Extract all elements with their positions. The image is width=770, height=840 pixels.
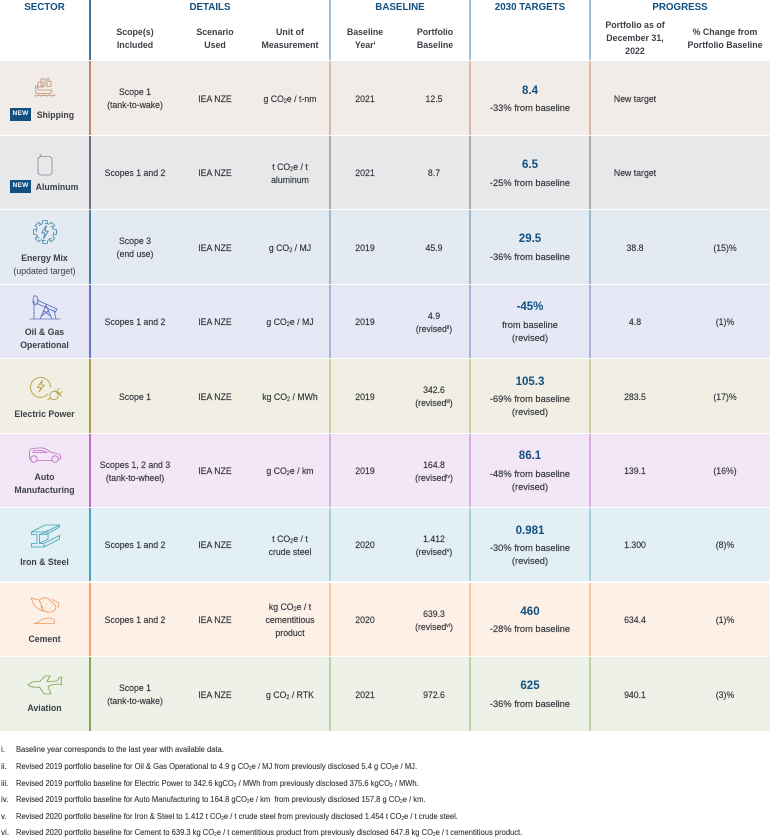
portfolio baseline: (revisedii) [416,324,452,335]
unit: t CO2e / t [272,534,308,545]
sub-heading: unit of measurement: Unit of [276,27,304,38]
baseline year: 2019 [355,466,375,477]
unit: kg CO2 / MWh [262,392,318,403]
footnote v [0,810,770,822]
scenario: IEA NZE [198,392,232,403]
scope: Scopes 1 and 2 [105,540,165,551]
icon: power plug and bolt [30,376,62,400]
portfolio baseline: 45.9 [425,243,443,254]
portfolio baseline: 342.6 [423,385,445,396]
unit [268,534,311,558]
target change: (revised) [512,482,548,493]
footnote v: Revised 2020 portfolio baseline for Iron & Steel to 1.412 t CO2e / t crude steel from previously disclosed 1.454 t CO2e / t crude steel. [16,812,458,822]
sector label: shipping: Shipping [37,110,74,121]
portfolio baseline: (revisediii) [415,398,453,409]
percent change: (1)% [716,317,734,328]
target value: -45% [517,301,543,313]
percent change: (1)% [716,615,734,626]
scenario: IEA NZE [198,466,232,477]
percent change: (16%) [713,466,737,477]
progress value: 139.1 [624,466,646,477]
badge: new [10,108,31,120]
portfolio baseline: 972.6 [423,690,445,701]
sub-heading: scopes included [116,27,154,51]
footnote vi: Revised 2020 portfolio baseline for Cement to 639.3 kg CO2e / t cementitious product from previously disclosed 647.8 kg CO2e / t cementitious product. [16,828,522,838]
scope [117,236,153,260]
portfolio baseline [416,534,452,558]
unit [271,162,309,186]
scope: Scopes 1 and 2 [105,615,165,626]
footnote vi [0,827,770,839]
badge: new: NEW [12,110,29,117]
row: energy mix [0,210,770,284]
target change: -25% from baseline [490,178,570,189]
target change: -48% from baseline [490,469,570,480]
progress value: 283.5 [624,392,646,403]
icon: pumpjack [30,295,60,320]
sub-heading: portfolio as of date: December 31, [606,33,664,44]
unit: g CO2e / t-nm [263,94,317,105]
footnote i [0,744,770,756]
sector label: cement: Cement [28,634,61,645]
scenario: IEA NZE [198,243,232,254]
sub-heading: portfolio as of date [605,20,665,57]
portfolio baseline: (revisedv) [416,547,452,558]
sub-heading: portfolio baseline: Portfolio [417,27,453,38]
footnote ii: ii. [1,762,7,771]
baseline year: 2021 [355,94,375,105]
scope [100,460,170,484]
footnote i: i. [1,745,5,754]
progress value: 1.300 [624,540,646,551]
heading: sector: SECTOR [24,1,65,13]
sector label: aluminum: Aluminum [36,182,78,193]
icon: airplane [28,676,62,694]
sector label: oil and gas operational: Operational [20,340,69,351]
portfolio baseline: 4.9 [428,311,440,322]
icon: gear with lightning bolt [33,220,57,244]
sub-heading: unit of measurement: Measurement [262,40,318,51]
target change [490,469,570,493]
heading: 2030 targets: 2030 TARGETS [495,1,565,13]
target change: (revised) [512,333,548,344]
row: auto manufacturing [0,434,770,507]
unit: kg CO2e / t [269,602,311,613]
row: electric power [0,359,770,432]
footnote vi: vi. [1,828,9,837]
heading: baseline: BASELINE [375,1,425,13]
scope: (tank-to-wake) [107,696,163,707]
sub-heading: portfolio as of date: Portfolio as of [605,20,665,31]
unit: t CO2e / t [272,162,308,173]
sector label: auto manufacturing: Auto [35,472,54,483]
progress value: 4.8 [629,317,641,328]
portfolio baseline: 12.5 [425,94,443,105]
sector label: energy mix: Energy Mix [21,253,68,264]
sector label: auto manufacturing [14,472,75,496]
scope: (tank-to-wheel) [106,473,164,484]
unit: g CO2e / km [266,466,314,477]
portfolio baseline: 164.8 [423,460,445,471]
portfolio baseline [415,609,453,633]
footnote ii [0,761,770,773]
icon: steel i-beam [31,524,60,548]
icon: cement rocks [30,597,60,624]
sector label: iron and steel: Iron & Steel [20,557,69,568]
scenario: IEA NZE [198,168,232,179]
sub-heading: baseline year: Yeari [355,40,375,51]
baseline year: 2019 [355,392,375,403]
footnote v: v. [1,812,7,820]
badge: new: NEW [12,182,29,189]
scope: Scope 1 [119,87,151,98]
icon: can [38,154,52,176]
sector label: auto manufacturing: Manufacturing [14,485,75,496]
sub-heading: baseline year [347,27,383,51]
target change: from baseline [502,320,558,331]
baseline year: 2020 [355,615,375,626]
progress: New target [614,94,656,105]
footnote ii: Revised 2019 portfolio baseline for Oil & Gas Operational to 4.9 g CO2e / MJ from previously disclosed 5.4 g CO2e / MJ. [16,762,417,772]
row: oil and gas [0,285,770,358]
sector label: electric power: Electric Power [14,408,75,420]
scope [94,658,176,732]
unit: g CO2e / MJ [266,317,314,328]
sector label: oil and gas operational: Oil & Gas [25,327,64,338]
sub-heading: scenario used: Used [204,40,226,51]
footnote iii: Revised 2019 portfolio baseline for Electric Power to 342.6 kgCO2 / MWh from previously disclosed 375.6 kgCO2 / MWh. [16,778,419,788]
baseline year: 2019 [355,317,375,328]
target value: 8.4 [522,85,538,97]
sub-heading: portfolio as of date: 2022 [625,46,645,57]
heading: details: DETAILS [189,1,231,13]
portfolio baseline [416,311,452,335]
target change: -36% from baseline [490,252,570,263]
badge: new [10,180,31,193]
row: iron and steel [0,508,770,581]
target change: -28% from baseline [490,624,570,635]
progress value: 940.1 [624,690,646,701]
target change [502,320,558,344]
target value: 0.981 [516,525,544,537]
scope: Scope 1 [119,392,151,403]
unit [265,602,314,639]
footnote iv [0,794,770,806]
target change: -36% from baseline [490,699,570,710]
scenario: IEA NZE [198,317,232,328]
target change [490,543,570,567]
scope [107,87,163,111]
sub-heading: portfolio baseline: Baseline [417,40,453,51]
portfolio baseline: 639.3 [423,609,445,620]
scope: Scope 1 [119,683,151,694]
unit: g CO2 / MJ [269,243,311,254]
footnote iv: iv. [1,795,8,804]
sub-heading: percent change: % Change from [693,27,757,38]
baseline year: 2019 [355,243,375,254]
target change: -30% from baseline [490,543,570,554]
sub-heading: scenario used: Scenario [196,27,234,38]
portfolio baseline [415,460,453,484]
target value: 625 [520,680,540,692]
footnote iv: Revised 2019 portfolio baseline for Auto Manufacturing to 164.8 gCO2e / km from previously disclosed 157.8 g CO2e / km. [16,795,425,805]
scenario: IEA NZE [198,615,232,626]
portfolio baseline: 1.412 [423,534,445,545]
scope: (tank-to-wake) [107,100,163,111]
baseline year: 2021 [355,168,375,179]
sector label: oil and gas operational [20,327,69,351]
sub-heading: scenario used [196,27,234,51]
target value: 6.5 [522,159,538,171]
target value: 105.3 [516,376,544,388]
scope: Scopes 1, 2 and 3 [100,460,170,471]
sub-heading: portfolio baseline [417,27,453,51]
unit: crude steel [269,547,311,558]
unit: product [275,628,305,639]
scenario: IEA NZE [198,690,232,701]
scope: (end use) [117,249,153,260]
target value: 86.1 [519,450,541,462]
sub-heading: percent change [687,27,763,51]
sub-heading: percent change: Portfolio Baseline [687,40,763,51]
portfolio baseline: (revisediv) [415,473,453,484]
target value: 460 [520,606,540,618]
footnote iii [0,778,770,790]
icon: car [29,448,61,463]
percent change: (15)% [713,243,737,254]
target change: (revised) [512,556,548,567]
icon: ship [34,78,56,96]
target value: 29.5 [519,233,541,245]
header: column group titles and sub-headings [24,0,763,60]
percent change: (8)% [716,540,734,551]
heading: progress: PROGRESS [652,1,708,13]
percent change: (3)% [716,690,734,701]
footnotes [0,744,770,840]
target change: -33% from baseline [490,103,570,114]
target change: (revised) [512,407,548,418]
progress value: 634.4 [624,615,646,626]
scenario: IEA NZE [198,540,232,551]
progress value: 38.8 [626,243,644,254]
scenario: IEA NZE [198,94,232,105]
sub-heading: baseline year: Baseline [347,27,383,38]
portfolio baseline: (revisedvi) [415,622,453,633]
target change: -69% from baseline [490,394,570,405]
sub-heading: scopes included: Scope(s) [116,27,154,38]
portfolio baseline: 8.7 [428,168,440,179]
sector label: energy mix: (updated target) [13,266,76,277]
unit: g CO2 / RTK [266,690,314,701]
sector label: energy mix [13,253,76,277]
footnote i: Baseline year corresponds to the last year with available data. [16,745,224,754]
unit: aluminum [271,175,309,186]
row: aluminum [0,136,770,209]
scope: Scope 3 [119,236,151,247]
progress: New target [614,168,656,179]
sub-heading: scopes included: Included [117,40,153,51]
row: aviation [0,657,770,730]
baseline year: 2020 [355,540,375,551]
portfolio baseline [415,385,453,409]
scope: Scopes 1 and 2 [105,168,165,179]
scope: Scopes 1 and 2 [105,317,165,328]
sub-heading: unit of measurement [262,27,318,51]
baseline year: 2021 [355,690,375,701]
row: cement [0,583,770,656]
row: shipping [0,61,770,134]
unit: cementitious [265,615,314,626]
percent change: (17)% [713,392,737,403]
sector label: aviation: Aviation [27,703,62,714]
footnote iii: iii. [1,778,9,788]
target change [490,394,570,418]
